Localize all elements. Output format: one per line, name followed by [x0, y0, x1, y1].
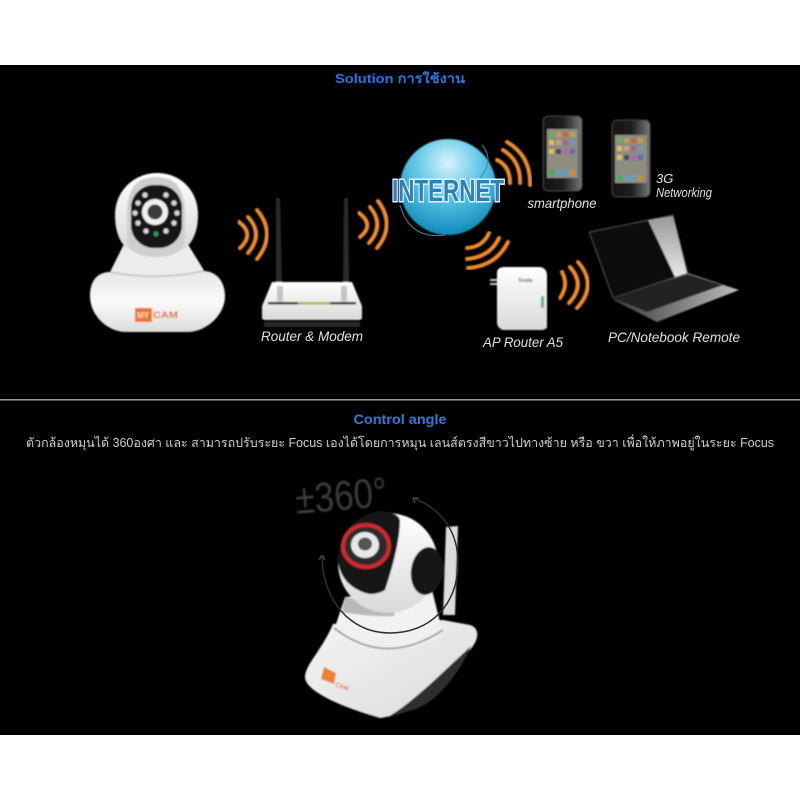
icon: laptop: [589, 215, 739, 322]
heading: solution: Solution การใช้งาน: [335, 70, 465, 86]
icon: rotating camera: [305, 511, 477, 718]
icon: 3G phone: [612, 120, 650, 197]
icon: AP router: [490, 267, 547, 330]
icon: internet globe: INTERNET: [392, 173, 504, 208]
arrow: rotation arc: [319, 498, 458, 633]
label: 3G networking: Networking: [656, 185, 713, 200]
icon: white dome camera: [90, 173, 225, 332]
label: 3G networking: 3G: [656, 171, 673, 186]
icon: wifi waves router to internet: [359, 201, 387, 248]
icon: wifi waves camera to router: [239, 210, 267, 259]
label: plus minus 360 degrees: ±360°: [293, 468, 389, 523]
divider: [0, 399, 800, 400]
description text: ตัวกล้องหมุนได้ 360องศา และ สามารถปรับระยะ Focus เองได้โดยการหมุน เลนส์ตรงสีขาวไปทางซ้าย หรือ ขวา เพื่อให้ภาพอยู่ในระยะ Focus: [26, 434, 774, 451]
icon: rotating camera: CAM: [334, 682, 349, 693]
label: PC/Notebook remote: PC/Notebook Remote: [608, 329, 740, 345]
icon: white dome camera: CAM: [153, 310, 178, 320]
label: smartphone: smartphone: [528, 195, 597, 211]
icon: white dome camera: MY: [137, 311, 150, 320]
icon: smartphone: [543, 116, 582, 191]
icon: AP router: Tenda: [518, 278, 533, 284]
label: router and modem: Router & Modem: [261, 328, 363, 344]
icon: internet globe: [392, 139, 504, 236]
label: 3G networking: [656, 171, 713, 200]
heading: control angle: Control angle: [354, 412, 447, 427]
icon: wifi waves internet to phones: [497, 142, 530, 185]
icon: wifi waves internet to AP router: [467, 233, 508, 268]
icon: router: [262, 198, 362, 327]
label: AP router A5: AP Router A5: [482, 334, 563, 350]
icon: wifi waves AP router to laptop: [560, 262, 588, 308]
